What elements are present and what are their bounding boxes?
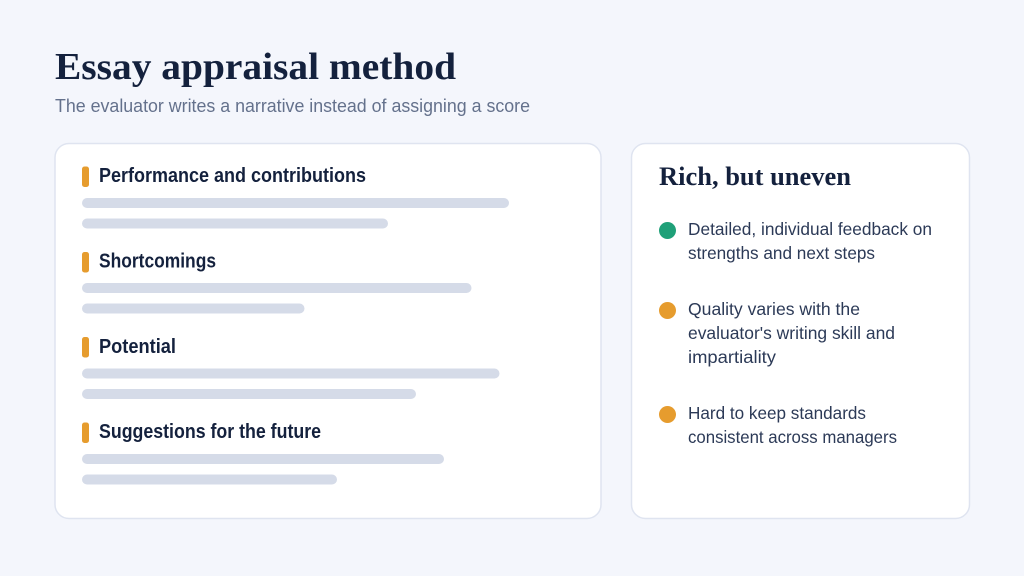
section: suggestions for the future: Suggestions for the future xyxy=(99,421,321,443)
section: potential xyxy=(82,336,500,399)
panel: rich but uneven xyxy=(632,144,970,518)
point: detailed feedback xyxy=(659,219,932,263)
point: detailed feedback: strengths and next steps xyxy=(688,243,875,263)
point: hard to keep standards: consistent across managers xyxy=(688,427,897,447)
point: quality varies: impartiality xyxy=(688,347,776,367)
section: shortcomings xyxy=(82,250,472,314)
point: detailed feedback: Detailed, individual feedback on xyxy=(688,219,932,239)
section: potential: Potential xyxy=(99,336,176,358)
section: performance and contributions xyxy=(82,165,509,228)
point: quality varies xyxy=(659,299,895,367)
point: hard to keep standards xyxy=(659,403,897,447)
panel heading: Rich, but uneven xyxy=(659,162,852,191)
title: Essay appraisal method xyxy=(55,46,456,88)
point: quality varies: Quality varies with the xyxy=(688,299,860,319)
subtitle: The evaluator writes a narrative instead of assigning a score xyxy=(55,96,530,116)
section: performance and contributions: Performance and contributions xyxy=(99,165,366,187)
point: quality varies: evaluator's writing skill and xyxy=(688,323,895,343)
section: shortcomings: Shortcomings xyxy=(99,250,216,272)
panel: essay sections xyxy=(55,144,601,518)
section: suggestions for the future xyxy=(82,421,444,484)
point: hard to keep standards: Hard to keep standards xyxy=(688,403,866,423)
